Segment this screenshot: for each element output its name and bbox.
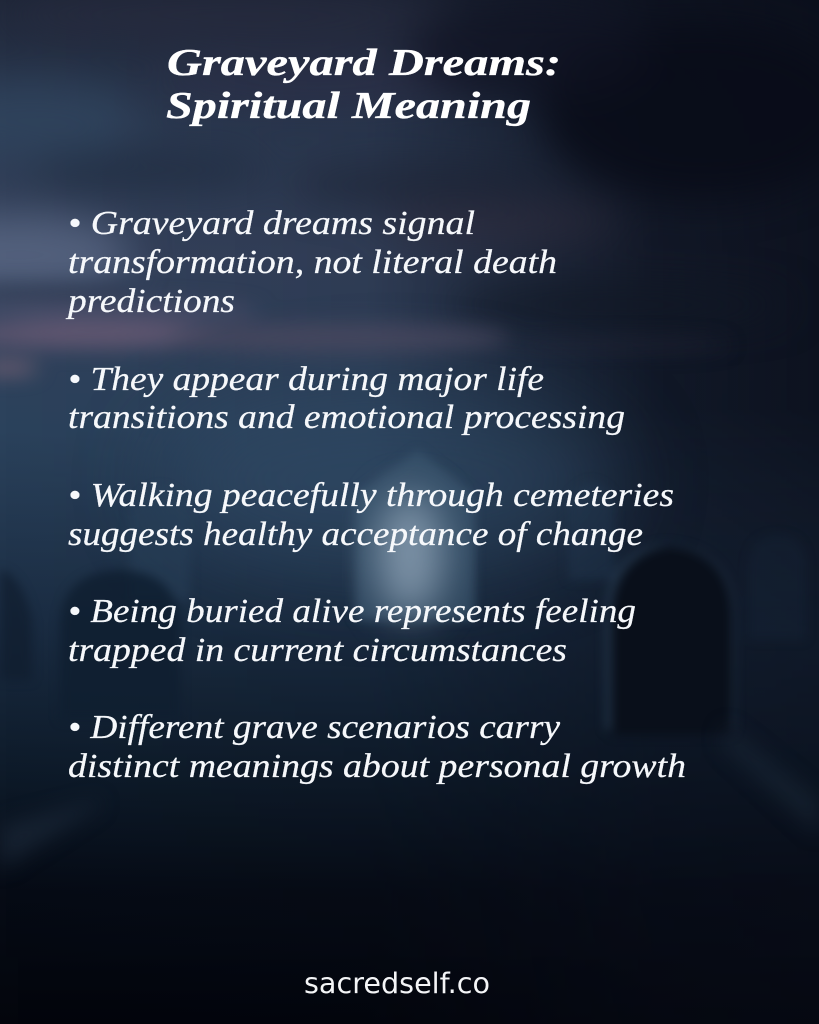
clouds [0, 0, 819, 323]
bullet: life transitions: transitions and emotional processing [68, 399, 625, 436]
bullet: buried alive: • Being buried alive represents feeling [68, 593, 636, 630]
bullet: buried alive [68, 593, 636, 669]
tombstones [0, 450, 806, 735]
bullet: transformation: predictions [66, 283, 235, 320]
bullet: grave scenarios [68, 709, 686, 785]
title [166, 42, 561, 127]
bullet: transformation: • Graveyard dreams signal [68, 205, 475, 242]
bullet: transformation: transformation, not literal death [68, 244, 557, 281]
bullet: transformation [66, 205, 557, 320]
footer: website: sacredself.co [304, 967, 490, 1000]
bullet: grave scenarios: • Different grave scenarios carry [68, 709, 561, 746]
title: Spiritual Meaning [166, 85, 531, 127]
center glow [160, 390, 620, 570]
bullet: buried alive: trapped in current circumstances [68, 632, 567, 669]
bullet: walking peacefully: • Walking peacefully through cemeteries [68, 477, 674, 514]
bullet: life transitions: • They appear during major life [68, 361, 544, 398]
title: Graveyard Dreams: [167, 42, 561, 84]
lit tomb glow [376, 493, 444, 617]
path edges [0, 725, 819, 870]
bullet: walking peacefully [68, 477, 674, 553]
bullet: life transitions [68, 361, 625, 436]
bullet: walking peacefully: suggests healthy acceptance of change [68, 516, 643, 553]
bullet: grave scenarios: distinct meanings about personal growth [68, 748, 686, 785]
